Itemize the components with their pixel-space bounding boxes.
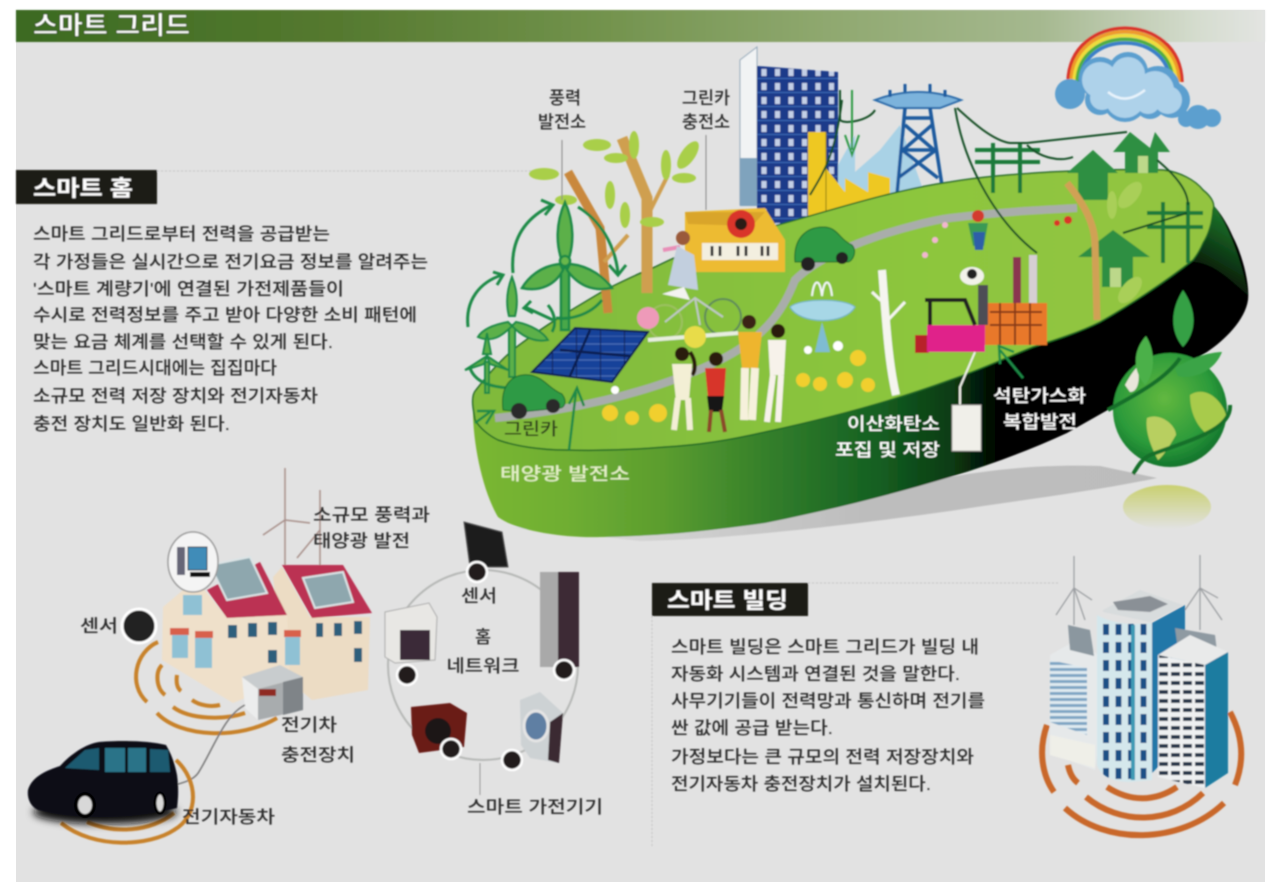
label: carbon capture and storage: 이산화탄소 (847, 414, 940, 434)
label: solar power station: 태양광 발전소 (500, 464, 630, 484)
label: home network: 네트워크 (446, 656, 520, 676)
illustration: family (672, 315, 786, 432)
diagram: home network ring (388, 570, 578, 795)
label: small scale wind and solar (313, 505, 430, 551)
illustration: power lines (810, 90, 1188, 253)
illustration: washing machine (520, 692, 563, 763)
label: green car: 그린카 (504, 419, 558, 439)
illustration: skyscraper (740, 47, 838, 226)
icon: appliance sensor dots (397, 562, 574, 770)
text block: smart home description: 소규모 전력 저장 장치와 전기자동차 (33, 386, 318, 406)
illustration: refrigerator (540, 572, 579, 667)
label: sensor ring: 센서 (461, 586, 497, 606)
label: small scale wind and solar: 소규모 풍력과 (313, 505, 430, 525)
label: home network (446, 627, 520, 676)
icon: sensor dot (122, 609, 156, 643)
illustration: green car foreground (503, 375, 565, 419)
label: carbon capture and storage: 포집 및 저장 (835, 440, 940, 460)
text block: smart home description: 각 가정들은 실시간으로 전기요금 정보를 알려주는 (33, 252, 428, 272)
label: green car charging station (682, 88, 730, 210)
illustration: grass island (473, 170, 1248, 537)
illustration: trees (529, 131, 703, 313)
heading: smart home: 스마트 홈 (33, 176, 133, 201)
label: green car charging station: 충전소 (682, 112, 730, 132)
heading: smart building (652, 583, 808, 616)
illustration: gnome figure (968, 210, 988, 250)
label: small scale wind and solar: 태양광 발전 (313, 531, 410, 551)
illustration: rainbow (1068, 28, 1182, 82)
label: wind power station (538, 88, 586, 200)
text block: smart home description: '스마트 계량기'에 연결된 가전제품들이 (33, 279, 344, 299)
illustration: flowers and bees (602, 216, 1072, 425)
icon: car signal arcs (61, 760, 193, 843)
illustration: building wind turbines (1056, 555, 1222, 630)
label: electric car: 전기자동차 (182, 807, 275, 827)
label: wind power station: 풍력 (549, 88, 581, 108)
illustration: globe with vine (1108, 290, 1230, 529)
icon: arrow to solar (569, 388, 584, 450)
illustration: fountain (790, 282, 855, 352)
illustration: charge cable (175, 705, 245, 785)
text block: smart building description: 사무기기들이 전력망과 통신하며 전기를 (671, 691, 985, 711)
title banner: 스마트 그리드 (33, 12, 190, 40)
illustration: cyclist (637, 231, 741, 348)
icon: arrow to plant (999, 346, 1023, 378)
illustration: solar panels (532, 328, 648, 382)
illustration: charging station (685, 208, 785, 272)
text block: smart home description: 수시로 전력정보를 주고 받아 다양한 소비 패턴에 (33, 305, 417, 325)
label: coal gasification combined generation: 복합발전 (1003, 412, 1077, 432)
text block: smart home description: 충전 장치도 일반화 된다. (33, 414, 230, 434)
icon: house signal arcs (136, 642, 277, 733)
illustration: two houses (162, 557, 372, 703)
label: coal gasification combined generation (993, 386, 1086, 432)
illustration: electric car (28, 741, 178, 824)
illustration: road (495, 208, 1077, 418)
illustration: island shadow (500, 466, 1157, 541)
illustration: transmission tower (875, 84, 961, 205)
label: EV charger (281, 715, 355, 765)
label: green car charging station: 그린카 (682, 88, 730, 108)
heading: smart building: 스마트 빌딩 (667, 588, 788, 613)
title banner (16, 10, 1265, 42)
icon: green recycling arrows (468, 200, 626, 388)
text block: smart building description: 가정보다는 큰 규모의 전력 저장장치와 (671, 747, 974, 767)
text block: smart home description: 맞는 요금 체계를 선택할 수 있게 된다. (33, 332, 333, 352)
illustration: smaller wind turbines (465, 277, 548, 393)
text block: smart home description: 스마트 그리드로부터 전력을 공급받는 (33, 224, 330, 244)
illustration: CO2 storage (952, 352, 981, 451)
icon: building signal arcs (1042, 712, 1241, 835)
label: coal gasification combined generation: 석탄가스화 (993, 386, 1086, 406)
text block: smart building description: 스마트 빌딩은 스마트 그리드가 빌딩 내 (671, 637, 979, 657)
text block: smart building description: 자동화 시스템과 연결된 것을 말한다. (671, 664, 960, 684)
illustration: brown right tree (1067, 183, 1097, 320)
illustration: charging unit (242, 665, 303, 720)
label: smart appliances: 스마트 가전기기 (467, 797, 603, 817)
illustration: green car near station (795, 227, 855, 271)
illustration: TV (464, 522, 508, 567)
icon: arrow to green car (475, 411, 494, 424)
text block: smart home description: 스마트 그리드시대에는 집집마다 (33, 358, 277, 378)
label: EV charger: 충전장치 (281, 745, 355, 765)
illustration: smart building cluster (1050, 590, 1228, 788)
text block: smart building description (671, 637, 985, 794)
illustration: white tree (872, 270, 905, 395)
illustration: red dryer (411, 703, 467, 753)
label: carbon capture and storage (835, 414, 940, 460)
illustration: factories (808, 125, 925, 226)
text block: smart home description (33, 224, 428, 434)
illustration: large wind turbine (522, 202, 612, 330)
heading: smart home (16, 170, 157, 204)
text block: smart building description: 싼 값에 공급 받는다. (671, 718, 833, 738)
illustration: rooftop wind turbines (263, 468, 320, 567)
label: wind power station: 발전소 (538, 112, 586, 132)
label: sensor: 센서 (80, 616, 118, 636)
illustration: coal gasification plant (915, 255, 1047, 353)
label: home network: 홈 (475, 627, 491, 647)
label: EV charger: 전기차 (281, 715, 337, 735)
icon: computer circle (168, 532, 218, 592)
text block: smart building description: 전기자동차 충전장치가 설치된다. (671, 774, 931, 794)
illustration: pale leaves on right meadow (1107, 178, 1146, 307)
illustration: right side houses and poles (975, 132, 1203, 287)
illustration: oven (385, 603, 437, 663)
illustration: smiling cloud (1055, 52, 1221, 129)
